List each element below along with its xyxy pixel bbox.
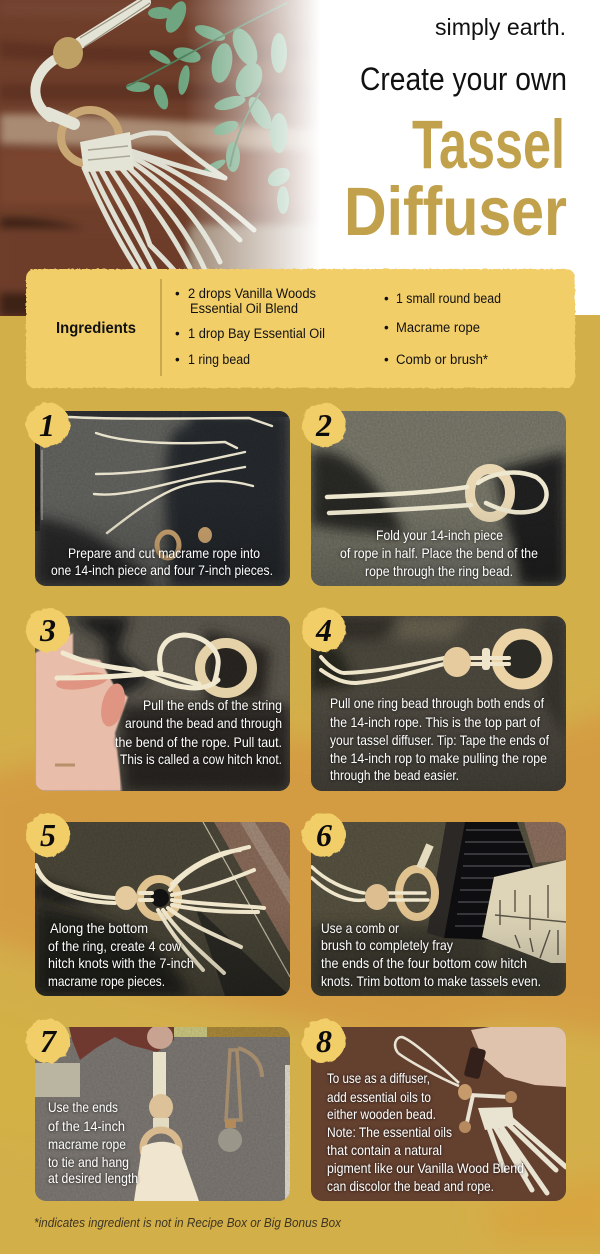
step 5 text <box>48 920 194 989</box>
step 4 text: the 14-inch rope. This is the top part of <box>330 714 540 730</box>
step 2 panel <box>311 411 566 586</box>
step 8 text: Note: The essential oils <box>327 1124 452 1140</box>
loop and tassel <box>395 1037 509 1127</box>
step 8 text: can discolor the bead and rope. <box>327 1178 494 1194</box>
step 4 text: the 14-inch rop to make pulling the rope <box>330 750 547 766</box>
fringe <box>482 860 566 963</box>
step 8 text: To use as a diffuser, <box>327 1070 430 1086</box>
greenery <box>126 0 293 214</box>
ingredients list: • <box>384 352 389 367</box>
step 4 text <box>330 695 549 783</box>
number badge 5: 5 <box>40 817 56 853</box>
step 1 text: Prepare and cut macrame rope into <box>68 545 260 561</box>
step 3 text: the bend of the rope. Pull taut. <box>115 734 282 750</box>
step 1 panel <box>35 411 290 586</box>
number badge 3: 3 <box>39 612 56 648</box>
step 4 text: Pull one ring bead through both ends of <box>330 695 544 711</box>
step 7 text: Use the ends <box>48 1099 118 1115</box>
ingredients list: • <box>384 320 389 335</box>
number badge 7 <box>26 1019 70 1063</box>
ingredients list: 2 drops Vanilla Woods <box>188 286 316 301</box>
step 3 panel <box>35 616 290 791</box>
step 8 text: add essential oils to <box>327 1089 431 1105</box>
number badge 5 <box>26 813 70 857</box>
number badge 3 <box>26 608 70 652</box>
number badge 2 <box>302 403 346 447</box>
number badge 7: 7 <box>40 1023 58 1059</box>
step 4 panel <box>311 616 566 791</box>
ingredients list: • <box>175 286 180 301</box>
step 3 text: around the bead and through <box>125 715 282 731</box>
step 7 text: macrame rope <box>48 1136 126 1152</box>
step 7 text <box>48 1099 138 1186</box>
step 1 text: one 14-inch piece and four 7-inch pieces. <box>51 562 273 578</box>
ingredients list: 1 drop Bay Essential Oil <box>188 326 325 341</box>
number badge 1: 1 <box>39 407 55 443</box>
ingredients list: • <box>175 326 180 341</box>
step 3 text <box>115 697 282 767</box>
step 5 panel <box>35 822 290 996</box>
step 7 text: at desired length <box>48 1170 138 1186</box>
hand <box>35 633 128 791</box>
number badge 8 <box>302 1019 346 1063</box>
number badge 2: 2 <box>315 407 332 443</box>
title <box>344 61 567 250</box>
ingredients list: 1 ring bead <box>188 352 250 367</box>
logo: simply earth: simply earth. <box>435 14 566 40</box>
number badge 6: 6 <box>316 817 332 853</box>
step 5 text: hitch knots with the 7-inch <box>48 955 194 971</box>
step 4 text: through the bead easier. <box>330 767 459 783</box>
step 5 text: of the ring, create 4 cow <box>48 938 182 954</box>
ingredients list <box>175 286 501 367</box>
step 2 text: rope through the ring bead. <box>365 563 513 579</box>
step 7 panel <box>35 1025 290 1201</box>
step 8 text: either wooden bead. <box>327 1106 436 1122</box>
sticker <box>35 1063 80 1097</box>
step 3 text: This is called a cow hitch knot. <box>120 751 282 767</box>
number badge 6 <box>302 813 346 857</box>
hand <box>69 1027 174 1060</box>
title: Diffuser <box>344 173 567 250</box>
step 6 text: knots. Trim bottom to make tassels even. <box>321 973 541 989</box>
comb <box>444 822 534 940</box>
step 3 text: Pull the ends of the string <box>143 697 282 713</box>
panel: ingredients <box>26 269 575 388</box>
step 8 text: pigment like our Vanilla Wood Blend <box>327 1160 524 1176</box>
step 6 text: the ends of the four bottom cow hitch <box>321 955 527 971</box>
ring and rope <box>200 643 252 693</box>
step 2 text <box>340 527 538 579</box>
ingredients list: Essential Oil Blend <box>190 301 298 316</box>
step 5 text: macrame rope pieces. <box>48 973 165 989</box>
hook and bottle <box>226 1050 241 1120</box>
step 1 text <box>51 545 273 578</box>
step 2 text: of rope in half. Place the bend of the <box>340 545 538 561</box>
ingredients list: • <box>384 291 389 306</box>
ingredients list: • <box>175 352 180 367</box>
step 8 panel <box>311 1027 566 1201</box>
number badge 8: 8 <box>316 1023 332 1059</box>
step 6 panel <box>311 822 566 996</box>
step 6 text <box>321 920 541 989</box>
header photo: macrame tassel on wood <box>0 0 330 316</box>
step 6 text: Use a comb or <box>321 920 399 936</box>
step 2 text: Fold your 14-inch piece <box>376 527 503 543</box>
footnote: *indicates ingredient is not in Recipe Box or Big Bonus Box <box>34 1216 342 1230</box>
ingredients list: 1 small round bead <box>396 291 501 306</box>
step 5 text: Along the bottom <box>50 920 148 936</box>
ingredients list: Comb or brush* <box>396 352 489 367</box>
number badge 4 <box>302 608 346 652</box>
heading: ingredients: Ingredients <box>56 320 136 337</box>
step 4 text: your tassel diffuser. Tip: Tape the ends of <box>330 732 549 748</box>
hand and bottle <box>471 1027 566 1087</box>
title: Create your own <box>360 61 567 97</box>
ingredients list: Macrame rope <box>396 320 480 335</box>
step 8 text <box>327 1070 524 1194</box>
step 8 text: that contain a natural <box>327 1142 442 1158</box>
number badge 1 <box>26 403 70 447</box>
step 7 text: to tie and hang <box>48 1154 129 1170</box>
number badge 4: 4 <box>315 612 332 648</box>
step 7 text: of the 14-inch <box>48 1118 125 1134</box>
step 6 text: brush to completely fray <box>321 937 453 953</box>
hanging rope and bead <box>153 1052 166 1098</box>
tassel <box>35 0 254 275</box>
